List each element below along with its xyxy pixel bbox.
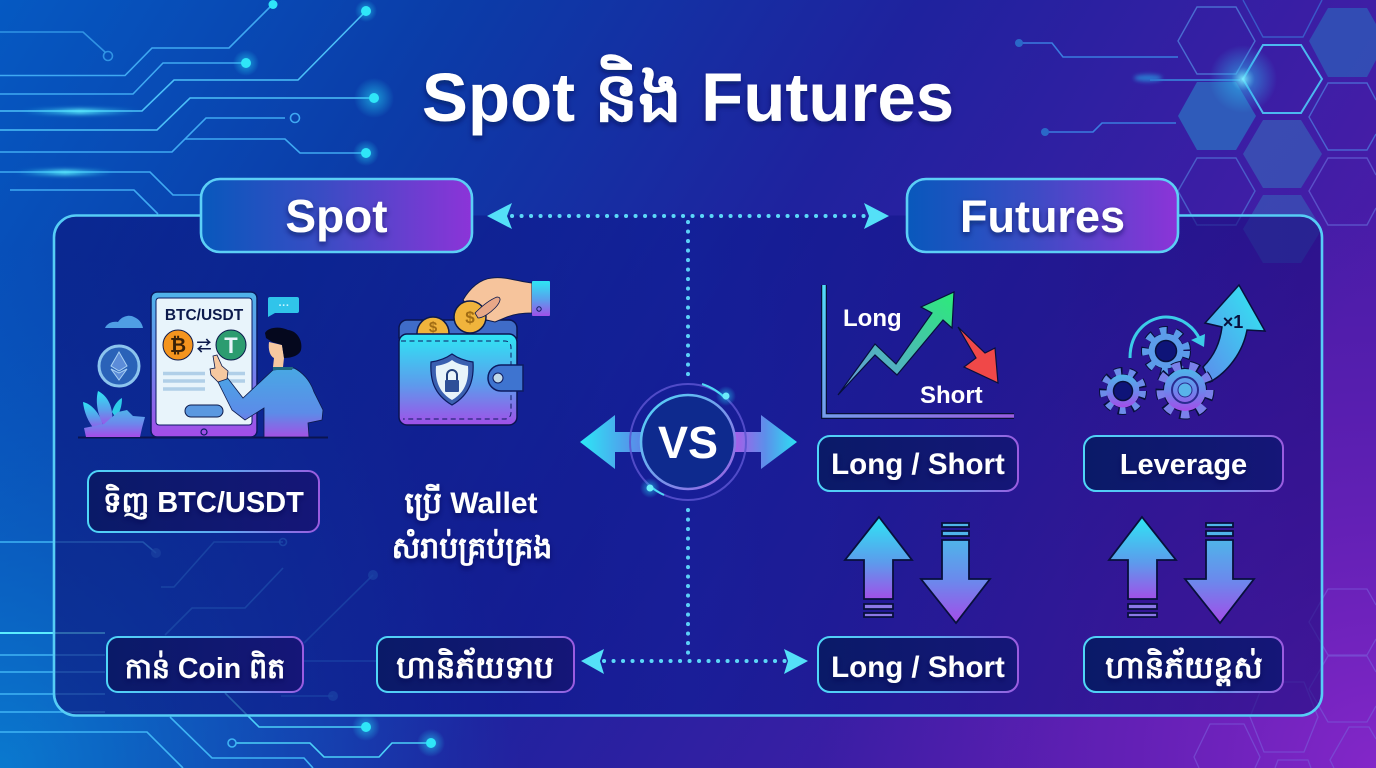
text: use wallet to manage: [392, 483, 552, 566]
label: Leverage: [1084, 436, 1283, 491]
circuit lines top left: [0, 0, 394, 214]
icon: Long Short chart: Long: [843, 305, 902, 332]
label: Long / Short top: [818, 436, 1018, 491]
icon: coin left: [417, 317, 449, 349]
icon: coin in hand: $: [465, 308, 475, 327]
down arrow bars: [1206, 523, 1233, 536]
icon: Long Short chart: [824, 285, 1014, 416]
label: Long / Short top: Long / Short: [831, 448, 1005, 481]
wallet clasp: [488, 365, 523, 391]
arrow: bottom right: [784, 649, 808, 674]
label: Leverage: Leverage: [1120, 449, 1247, 481]
down arrow bars: [942, 523, 969, 536]
icon: chat bubble: [268, 297, 299, 317]
up arrow: [845, 517, 912, 599]
label: Long / Short bottom: [818, 637, 1018, 692]
icon: person: [210, 328, 323, 437]
connector: vertical dotted line: [686, 222, 690, 660]
down arrow: [921, 540, 990, 623]
icon: leverage gears: [1104, 285, 1265, 414]
long arrow: [838, 292, 954, 395]
icon: coin in hand: [454, 301, 486, 333]
label: low risk: [377, 637, 574, 692]
icon: shield lock: [431, 354, 473, 405]
upward arrow: [1203, 285, 1265, 382]
label: buy BTC/USDT: ទិញ BTC/USDT: [103, 483, 304, 520]
icon: plant: [83, 391, 145, 437]
label: high risk: ហានិភ័យខ្ពស់: [1105, 647, 1263, 687]
text: use wallet to manage: សំរាប់គ្រប់គ្រង: [392, 528, 552, 566]
label: low risk: ហានិភ័យទាប: [396, 647, 554, 685]
arrow: bottom left: [581, 649, 604, 674]
stitching: [401, 341, 511, 419]
label: high risk: [1084, 637, 1283, 692]
icon: cloud: [105, 316, 143, 328]
icon: tablet: [151, 292, 257, 437]
outer ring: [630, 384, 746, 500]
heading tab: Futures: Futures: [960, 191, 1125, 242]
arrow: top right: [864, 203, 889, 229]
circle: [641, 395, 735, 489]
circular arrow: [1130, 317, 1205, 358]
illustration: wallet with coins: [399, 278, 550, 425]
icon: tablet: ₿: [170, 335, 186, 357]
arrows: up and down left pair: [845, 517, 990, 623]
hexagon pattern bottom right: [1194, 589, 1376, 768]
arrow: top left: [487, 203, 512, 229]
node dots: [640, 386, 736, 498]
icon: tablet: BTC/USDT: [165, 307, 244, 324]
heading tab: Spot: [201, 179, 472, 252]
up arrow: [1109, 517, 1176, 599]
icon: Long Short chart: Short: [920, 382, 983, 409]
down arrow: [1185, 540, 1254, 623]
VS badge: [580, 384, 797, 500]
icon: chat bubble: ···: [278, 300, 290, 312]
label: Long / Short bottom: Long / Short: [831, 651, 1005, 684]
up arrow bars: [864, 604, 893, 617]
arrow right: [734, 415, 797, 469]
chart axes: [824, 285, 1014, 416]
main panel: [54, 216, 1322, 716]
icon: ethereum coin: [99, 346, 139, 386]
gear upper: [1146, 331, 1186, 371]
label: buy BTC/USDT: [88, 471, 319, 532]
ring accents: [650, 384, 726, 495]
up arrow bars: [1128, 604, 1157, 617]
title: Spot និង Futures: [422, 54, 954, 136]
icon: thumb: [475, 297, 500, 318]
label: own real coin: [107, 637, 303, 692]
upward arrow: ×1: [1223, 312, 1243, 332]
short arrow: [958, 327, 998, 383]
wallet back: [399, 320, 517, 338]
panel border: [54, 216, 1322, 716]
text: use wallet to manage: ប្រើ Wallet: [404, 483, 538, 521]
gear large: [1161, 366, 1209, 414]
circuit lines bottom left: [0, 538, 445, 768]
hexagon pattern top right: [1015, 0, 1376, 263]
arrows: up and down right pair: [1109, 517, 1254, 623]
icon: tablet: T: [224, 333, 238, 358]
icon: hand: [463, 278, 532, 322]
ground line: [78, 436, 328, 438]
VS badge: VS: [658, 417, 718, 468]
label: own real coin: កាន់ Coin ពិត: [125, 650, 285, 685]
arrow left: [580, 415, 642, 469]
connector: top dotted horizontal with arrows: [487, 203, 889, 229]
illustration: trader with tablet BTC/USDT: [78, 292, 328, 438]
wallet front: [399, 334, 517, 425]
icon: coin left: $: [429, 319, 438, 336]
connector: bottom dotted horizontal with arrows: [581, 649, 808, 674]
icon: cuff: [532, 281, 550, 316]
heading tab: Spot: Spot: [285, 190, 388, 242]
heading tab: Futures: [907, 179, 1178, 252]
panel fill: [54, 216, 1322, 716]
gear left: [1104, 372, 1142, 410]
icon: tablet: ⇄: [196, 338, 212, 355]
